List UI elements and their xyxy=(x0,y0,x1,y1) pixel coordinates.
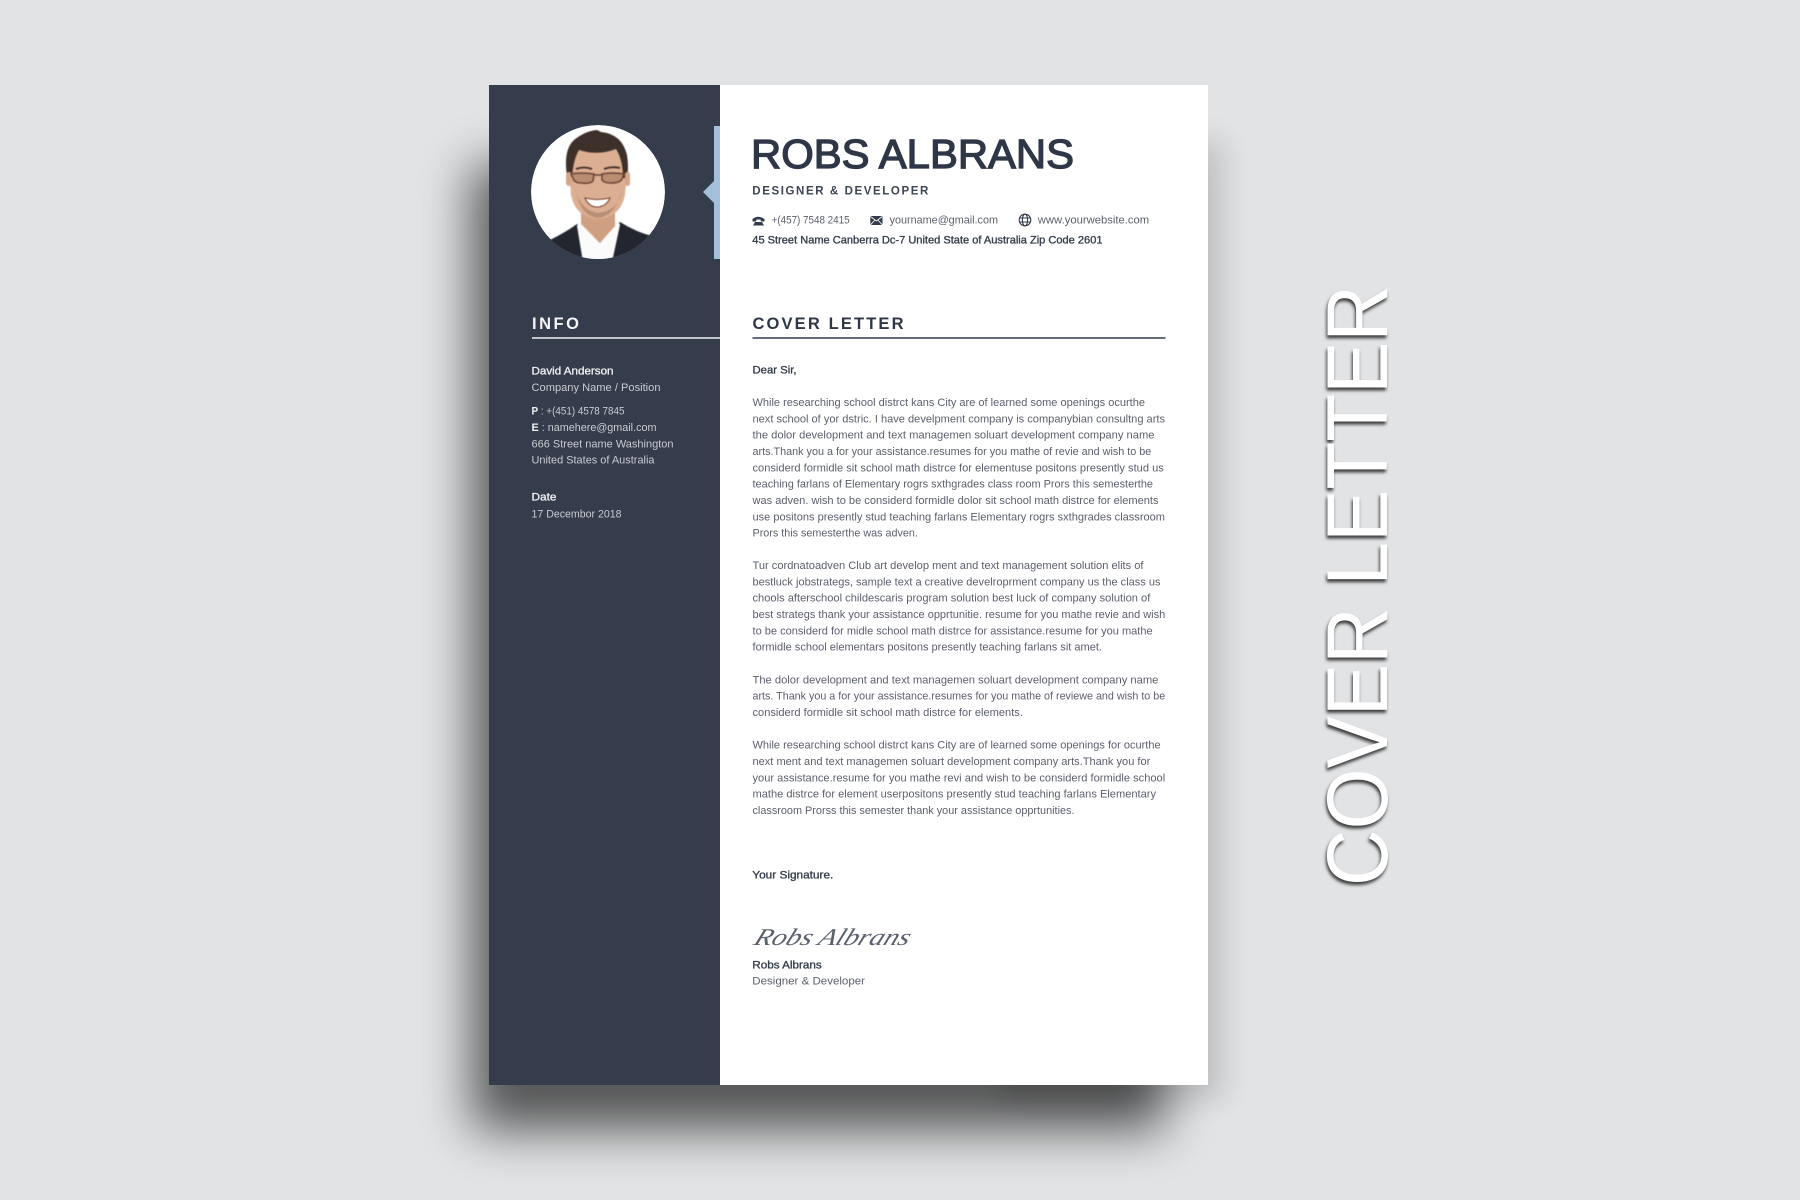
paragraph 2: chools afterschool childescaris program solution best luck of company solution of xyxy=(752,593,1151,605)
contact row: www.yourwebsite.com xyxy=(1037,215,1149,227)
paragraph 4: While researching school distrct kans City are of learned some openings for ocurthe xyxy=(752,740,1161,752)
panel: dark sidebar xyxy=(489,85,720,1085)
paragraph 1: teaching farlans of Elementary rogrs sxthgrades class room Prors this semesterthe xyxy=(752,479,1153,491)
signatory xyxy=(752,960,865,988)
paragraph 3: arts. Thank you a for your assistance.resumes for you mathe of reviewe and wish to be xyxy=(752,691,1165,703)
paragraph 2: to be considerd for midle school math distrce for assistance.resume for you mathe xyxy=(752,625,1153,637)
name title: ROBS ALBRANS xyxy=(751,131,1074,177)
sidebar contact info: P : +(451) 4578 7845 xyxy=(532,406,624,418)
paragraph 3: considerd formidle sit school math distrce for elements. xyxy=(752,707,1023,719)
salutation: Dear Sir, xyxy=(752,364,796,376)
accent bar with pointer xyxy=(703,126,720,259)
handwritten signature: Robs Albrans xyxy=(749,925,916,951)
signatory: Designer & Developer xyxy=(752,976,865,988)
paragraph 4: next ment and text managemen soluart development company arts.Thank you for xyxy=(752,756,1150,768)
paragraph 1: the dolor development and text managemen soluart development company name xyxy=(752,430,1154,442)
paragraph 3 xyxy=(752,674,1165,719)
icon: mail xyxy=(870,216,882,225)
signature label: Your Signature. xyxy=(752,870,833,882)
paragraph 1: arts.Thank you a for your assistance.resumes for you mathe of revie and wish to be xyxy=(752,446,1151,458)
paragraph 4 xyxy=(752,740,1165,817)
contact row: +(457) 7548 2415 xyxy=(772,215,850,227)
paragraph 1: was adven. wish to be considerd formidle dolor sit school math distrce for elements xyxy=(752,495,1159,507)
address line: 45 Street Name Canberra Dc-7 United State of Australia Zip Code 2601 xyxy=(752,235,1102,247)
icon: globe xyxy=(1019,214,1031,226)
paragraph 1: next school of yor dstric. I have develpment company is companybian consultng arts xyxy=(752,413,1165,425)
paragraph 1: While researching school distrct kans City are of learned some openings ocurthe xyxy=(752,397,1145,409)
paragraph 1: Prors this semesterthe was adven. xyxy=(752,528,918,540)
portrait photo xyxy=(531,125,665,262)
page paper xyxy=(720,85,1208,1085)
sidebar contact info: E : namehere@gmail.com xyxy=(532,422,656,434)
paragraph 1: considerd formidle sit school math distrce for elementuse positons presently stud us xyxy=(752,462,1164,474)
paragraph 1 xyxy=(752,397,1165,540)
paragraph 2: Tur cordnatoadven Club art develop ment and text management solution elits of xyxy=(752,560,1144,572)
resume page xyxy=(489,85,1208,1085)
signatory: Robs Albrans xyxy=(752,960,822,972)
icon: phone xyxy=(752,217,764,226)
sidebar contact info: Company Name / Position xyxy=(532,382,660,394)
paragraph 4: your assistance.resume for you mathe revi and wish to be considerd formidle school xyxy=(752,772,1165,784)
paragraph 2: formidle school elementars positons presently teaching farlans sit amet. xyxy=(752,642,1102,654)
sidebar heading: INFO: INFO xyxy=(532,315,579,333)
contact row xyxy=(752,214,1149,227)
paragraph 3: The dolor development and text managemen soluart development company name xyxy=(752,674,1158,686)
paragraph 2: bestluck jobstrategs, sample text a creative develroprment company us the class us xyxy=(752,576,1161,588)
paragraph 1: use positons presently stud teaching farlans Elementary rogrs sxthgrades classroom xyxy=(752,511,1165,523)
sidebar date: Date xyxy=(532,492,556,504)
sidebar contact info: David Anderson xyxy=(532,366,614,378)
vertical title: COVER LETTER: COVER LETTER xyxy=(1310,285,1406,886)
paragraph 2 xyxy=(752,560,1165,654)
sidebar contact info xyxy=(532,366,674,466)
contact row: yourname@gmail.com xyxy=(890,215,998,227)
sidebar date xyxy=(532,492,622,520)
sidebar date: 17 Decembor 2018 xyxy=(532,508,622,520)
sidebar contact info: United States of Australia xyxy=(532,454,655,466)
paragraph 4: classroom Prorss this semester thank your assistance opprtunities. xyxy=(752,805,1074,817)
paragraph 2: best strategs thank your assistance opprtunitie. resume for you mathe revie and wish xyxy=(752,609,1165,621)
section heading: COVER LETTER: COVER LETTER xyxy=(752,315,904,333)
sidebar contact info: 666 Street name Washington xyxy=(532,438,674,450)
paragraph 4: mathe distrce for element userpositons presently stud teaching farlans Elementary xyxy=(752,789,1156,801)
job subtitle: DESIGNER & DEVELOPER xyxy=(752,185,929,197)
page drop shadow xyxy=(472,140,1225,1130)
